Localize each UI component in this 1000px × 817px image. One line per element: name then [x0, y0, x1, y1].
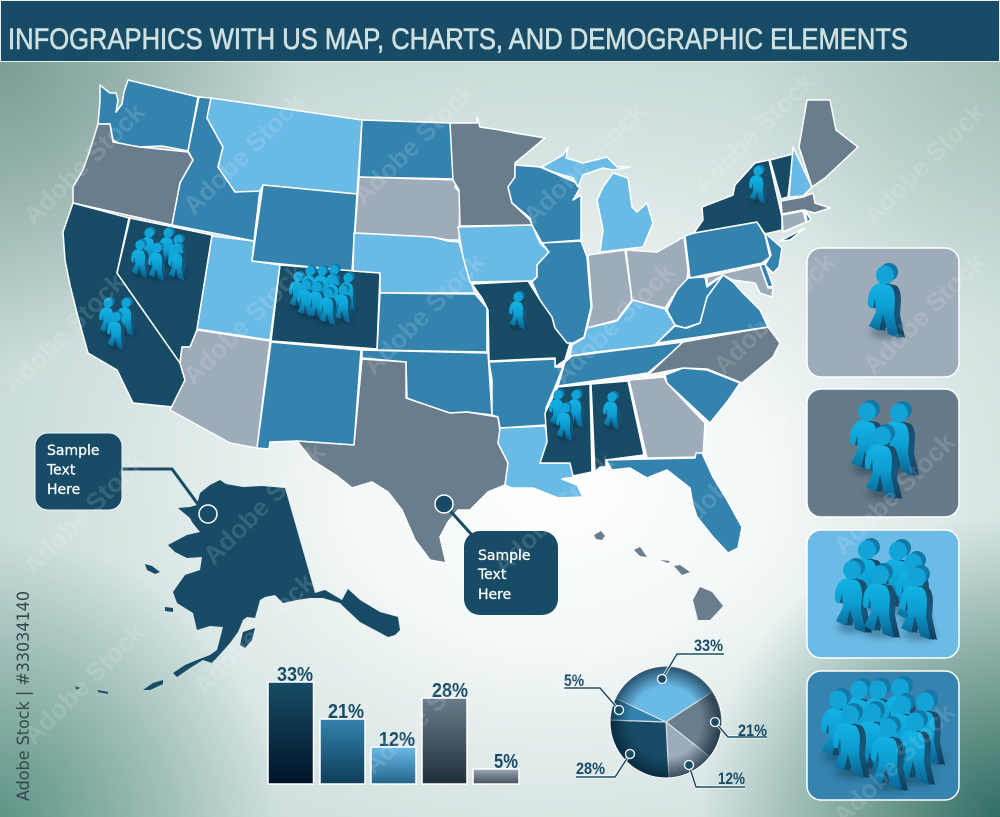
state: MI upper [542, 147, 630, 187]
state: Alaska [75, 480, 400, 694]
state: LA [498, 426, 583, 498]
watermarks: Adobe Stock [687, 66, 821, 200]
bar labels: 12% [379, 728, 415, 751]
watermarks: Adobe Stock [347, 76, 481, 210]
state: ND [359, 120, 457, 179]
panel: six people [807, 530, 959, 658]
state: MO [472, 281, 570, 367]
watermarks: Adobe Stock [177, 256, 311, 390]
callout: Texas: Text [477, 567, 507, 583]
state: TN [558, 342, 683, 386]
pie labels: 28% [576, 760, 605, 778]
watermarks: Adobe Stock [857, 96, 991, 230]
pie sectors [610, 667, 721, 778]
state: SC [665, 368, 740, 423]
watermarks: Adobe Stock [517, 96, 651, 230]
watermarks: Adobe Stock [197, 436, 331, 570]
pie labels: 12% [718, 770, 745, 788]
people: Colorado group [289, 264, 358, 326]
callout: Alaska: Sample [47, 443, 100, 459]
pie leader lines [564, 654, 767, 787]
watermarks: Adobe Stock [547, 566, 681, 700]
state: PA [685, 222, 770, 278]
state: IL [532, 241, 591, 343]
callout: Alaska: Text [46, 462, 76, 478]
people: California group [99, 297, 136, 350]
bar: 28% [422, 698, 467, 784]
state: NJ [765, 233, 782, 273]
people: Mississippi group [549, 389, 586, 441]
state: VT [770, 154, 793, 199]
state: CO [271, 265, 380, 349]
people: Missouri [509, 291, 528, 330]
state: NM [257, 342, 361, 449]
watermarks: Adobe Stock [857, 246, 991, 380]
state: NY [694, 160, 782, 234]
Hawaii [594, 531, 723, 620]
state: KY [570, 300, 675, 356]
state: SD [355, 177, 460, 240]
watermarks: Adobe Stock [547, 256, 681, 390]
state: WV [667, 275, 723, 328]
state: UT [197, 236, 280, 340]
state: ID [172, 97, 260, 241]
state: CT [782, 211, 806, 232]
title banner [0, 0, 1000, 62]
state: OK [362, 350, 492, 415]
state: WI [508, 165, 581, 243]
watermarks: Adobe Stock [487, 446, 621, 580]
pie chart [564, 637, 767, 788]
bar labels: 33% [277, 663, 313, 686]
bar chart [268, 663, 519, 784]
state: IN [587, 250, 632, 328]
callout: Texas [435, 495, 558, 615]
bar labels: 5% [494, 750, 518, 773]
state: NC [648, 327, 780, 383]
watermarks: Adobe Stock [357, 246, 491, 380]
bar: 21% [320, 719, 365, 784]
pie labels: 21% [738, 722, 767, 740]
state: RI [805, 210, 811, 222]
pie dots [614, 674, 720, 770]
state: MN [450, 117, 545, 226]
watermarks: Adobe Stock [827, 426, 961, 560]
state: AR [489, 359, 563, 428]
state: OR [73, 124, 193, 225]
pie labels [564, 637, 767, 788]
callout: Texas: Here [478, 587, 511, 603]
state: NH [789, 147, 812, 197]
state: MI lower [597, 173, 653, 252]
watermarks: Adobe Stock [667, 406, 801, 540]
state: DE [760, 264, 773, 287]
state: TX [297, 359, 508, 563]
watermarks: Adobe Stock [17, 96, 151, 230]
bar labels: 28% [432, 679, 468, 702]
state: NV [117, 218, 212, 363]
watermarks: Adobe Stock [187, 566, 321, 700]
state: OH [626, 237, 688, 308]
bar: 33% [268, 682, 314, 784]
watermarks: Adobe Stock [17, 446, 151, 580]
state: Long Island [780, 228, 805, 241]
watermarks: Adobe Stock [17, 616, 151, 750]
state: FL [606, 453, 742, 553]
state: VA [657, 275, 768, 343]
panel: three people [807, 389, 959, 517]
pie labels: 33% [694, 637, 723, 655]
pie labels: 5% [564, 672, 584, 690]
state: WA [98, 80, 198, 151]
callout: Alaska: Here [47, 482, 80, 498]
bar: 5% [473, 769, 519, 784]
people: Alabama [603, 391, 622, 430]
state: AL [591, 381, 644, 472]
state: MS [540, 384, 592, 476]
state: MA [781, 193, 830, 214]
bar: 12% [371, 747, 416, 784]
state: NE [353, 233, 475, 293]
people: New York [749, 165, 768, 204]
callout: Texas: Sample [478, 548, 530, 564]
state: MT [207, 98, 362, 194]
state: KS [377, 293, 487, 352]
bar labels [277, 663, 518, 773]
state: WY [252, 185, 357, 271]
watermarks: Adobe Stock [0, 266, 131, 400]
watermarks: Adobe Stock [707, 246, 841, 380]
state: GA [629, 377, 705, 458]
panel: ten people [807, 671, 959, 800]
state: MD [707, 265, 773, 297]
stock id text: Adobe Stock | #33034140 [14, 591, 34, 801]
callout: Alaska [35, 433, 217, 523]
bar labels: 21% [328, 700, 364, 723]
people: Nevada group [131, 227, 188, 281]
watermarks: Adobe Stock [357, 646, 491, 780]
state: IA [458, 225, 549, 282]
state: CA [63, 203, 185, 407]
state: ME [799, 100, 858, 187]
state: AZ [170, 330, 270, 448]
US map [63, 80, 858, 563]
panel: one person [807, 248, 959, 377]
watermarks: Adobe Stock [177, 86, 311, 220]
